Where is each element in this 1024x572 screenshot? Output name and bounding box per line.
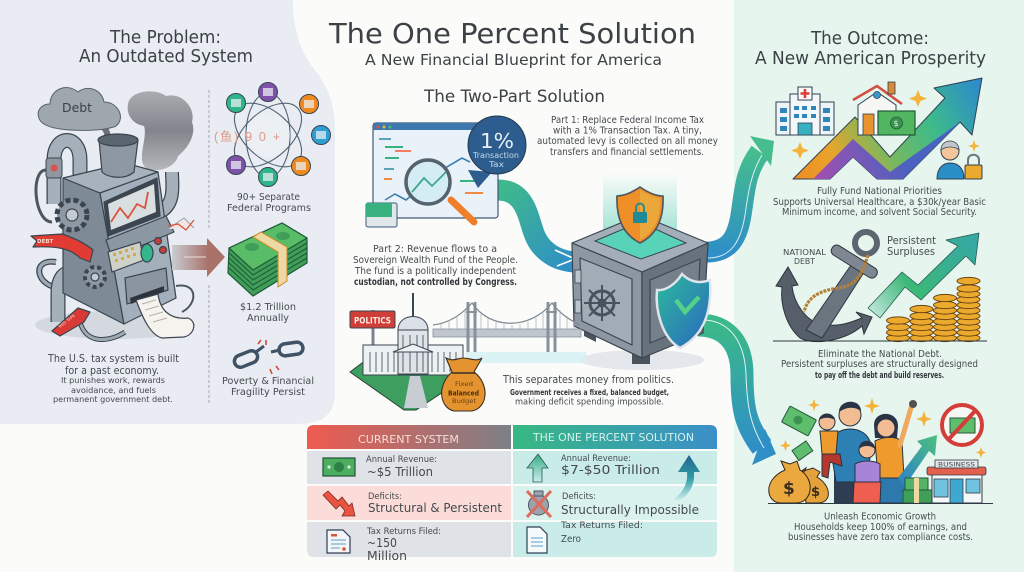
text: part 1: Part 1: Replace Federal Income Tax bbox=[551, 115, 704, 126]
label: national debt: NATIONAL bbox=[783, 248, 827, 257]
arrow: badge to vault bbox=[498, 190, 578, 262]
label: national debt bbox=[783, 248, 827, 266]
icon: sparkles bbox=[791, 90, 980, 159]
icon: house and cash: $ bbox=[894, 119, 899, 128]
icon: broken tax machine bbox=[31, 134, 195, 340]
icon: tax return document bbox=[327, 530, 350, 553]
text: part 2: The fund is a politically independent bbox=[354, 266, 516, 277]
shield with check bbox=[657, 274, 710, 348]
paper receipt bbox=[136, 294, 194, 338]
text: part 2: Sovereign Wealth Fund of the People. bbox=[353, 255, 518, 266]
green base bbox=[350, 360, 462, 410]
icon: surplus arrow bbox=[868, 233, 979, 318]
heading: the problem: An Outdated System bbox=[79, 47, 253, 67]
text: unleash economic growth: Unleash Economic Growth bbox=[824, 512, 936, 522]
politics sign bbox=[372, 310, 374, 348]
icon: capitol with politics sign bbox=[350, 293, 463, 410]
comparison table bbox=[307, 425, 717, 563]
icon: fixed balanced budget bag: Balanced bbox=[448, 388, 479, 398]
icon: blank document bbox=[527, 527, 547, 553]
child bbox=[819, 414, 842, 478]
vault faces bbox=[572, 243, 642, 358]
arrow: lower stream head bbox=[555, 250, 575, 266]
column: current system: Annual Revenue: bbox=[366, 455, 437, 465]
icon: family bbox=[819, 400, 917, 503]
capitol building bbox=[363, 345, 463, 375]
machine body bbox=[63, 178, 124, 324]
text: part 2 bbox=[353, 244, 518, 288]
heading: the problem bbox=[79, 28, 253, 67]
text: 1.2 trillion annually bbox=[240, 302, 296, 324]
heading: two-part solution: The Two-Part Solution bbox=[423, 87, 605, 106]
text: eliminate the national debt bbox=[781, 349, 978, 380]
small broken chart bbox=[168, 218, 194, 229]
icon: no tax sign bbox=[942, 405, 982, 445]
icon: transaction dashboard bbox=[366, 123, 498, 227]
icon: stack of cash bbox=[228, 223, 307, 296]
column: current system: Deficits: bbox=[368, 492, 402, 502]
text: poverty and financial fragility: Fragility Persist bbox=[231, 387, 305, 398]
icon: broken chain bbox=[233, 340, 304, 374]
label: persistent surpluses: Persistent bbox=[887, 235, 936, 247]
column: the one percent solution: Tax Returns Filed: bbox=[560, 521, 643, 531]
panel: the outcome background bbox=[734, 0, 1024, 572]
text: eliminate the national debt: Eliminate the National Debt. bbox=[818, 349, 942, 360]
icon: broken tax machine: RED TAPE bbox=[58, 313, 76, 329]
column: the one percent solution: Zero bbox=[561, 534, 581, 545]
icon: federal programs network bbox=[214, 82, 330, 186]
text: separates money from politics: making deficit spending impossible. bbox=[515, 398, 664, 408]
magnifying glass bbox=[451, 200, 474, 222]
text: eliminate the national debt: Persistent surpluses are structurally designed bbox=[781, 359, 978, 370]
icon: fixed balanced budget bag: Budget bbox=[452, 397, 476, 405]
text: separates money from politics: This separates money from politics. bbox=[502, 374, 674, 386]
text: eliminate the national debt: to pay off the debt and build reserves. bbox=[815, 370, 944, 380]
text: part 1: transfers and financial settlements. bbox=[550, 147, 704, 158]
icon: federal programs network: (鱼) 9 0 + bbox=[214, 130, 280, 144]
shield with lock bbox=[617, 187, 663, 243]
icon: falling red arrow bbox=[323, 491, 355, 516]
icon: fixed balanced budget bag: Fixed bbox=[455, 380, 473, 388]
text: fully fund national priorities: Minimum income, and solvent Social Security. bbox=[782, 207, 977, 218]
arrow: problem to costs bbox=[172, 238, 225, 277]
text: part 2: custodian, not controlled by Congress. bbox=[354, 277, 517, 288]
arrow: stream to outcome 1 bbox=[700, 136, 774, 258]
dashboard card bbox=[366, 203, 397, 227]
icon: business shop: BUSINESS bbox=[938, 462, 975, 468]
text: poverty and financial fragility bbox=[222, 376, 314, 398]
column: current system: Tax Returns Filed: bbox=[366, 527, 441, 537]
column: the one percent solution: Structurally Impossible bbox=[561, 502, 699, 517]
column: current system: ~$5 Trillion bbox=[367, 464, 433, 479]
panel: the problem bbox=[0, 0, 335, 424]
ground line bbox=[773, 340, 987, 342]
heading: the outcome bbox=[755, 29, 986, 69]
heading: the problem: The Problem: bbox=[109, 28, 221, 48]
text: problem description: It punishes work, rewards bbox=[61, 375, 165, 385]
icon: business shop bbox=[927, 460, 986, 503]
heading: the outcome: The Outcome: bbox=[810, 29, 929, 49]
column: current system bbox=[307, 425, 511, 563]
text: 90+ separate federal programs bbox=[227, 192, 311, 214]
arrow: stream to outcome 3 bbox=[698, 320, 776, 465]
vault feet bbox=[584, 324, 596, 342]
father bbox=[830, 402, 871, 503]
divider bbox=[208, 90, 210, 230]
icon: broken tax machine: DEBT bbox=[37, 239, 54, 245]
text: part 1: automated levy is collected on all money bbox=[537, 136, 718, 147]
column: the one percent solution: Deficits: bbox=[562, 492, 596, 502]
icon: bridge bbox=[433, 302, 586, 363]
badge: 1% transaction tax bbox=[468, 116, 526, 188]
text: problem description: permanent government debt. bbox=[53, 394, 173, 404]
title: A New Financial Blueprint for America bbox=[365, 51, 662, 69]
text: separates money from politics: Government receives a fixed, balanced budget, bbox=[510, 387, 669, 397]
text: problem description: for a past economy. bbox=[65, 365, 159, 377]
icon: flying cash bbox=[782, 406, 816, 461]
label: persistent surpluses bbox=[887, 235, 936, 258]
text: problem description: The U.S. tax system is built bbox=[47, 353, 179, 365]
icon: rising blue arrow bbox=[673, 455, 700, 500]
text: 90+ separate federal programs: Federal Programs bbox=[227, 203, 311, 214]
panel: the two-part solution bbox=[350, 87, 776, 465]
text: part 1: with a 1% Transaction Tax. A tiny, bbox=[553, 126, 702, 136]
icon: rainbow growth arrow bbox=[793, 78, 982, 179]
text: 1.2 trillion annually: Annually bbox=[247, 313, 289, 324]
column: the one percent solution bbox=[513, 425, 717, 557]
vault shadow bbox=[580, 350, 704, 370]
badge: 1% transaction tax: Transaction bbox=[472, 151, 519, 160]
girl bbox=[853, 441, 881, 503]
icon: vault with shields bbox=[572, 173, 710, 370]
badge: 1% transaction tax: 1% bbox=[480, 129, 514, 153]
column: current system: Million bbox=[367, 548, 407, 563]
column: the one percent solution: $7-$50 Trillion bbox=[561, 462, 660, 477]
icon: debt cloud: Debt bbox=[62, 100, 92, 115]
machine keypad bbox=[108, 242, 144, 272]
text: problem description: avoidance, and fuels bbox=[71, 385, 156, 395]
panel: the outcome bbox=[755, 29, 993, 543]
text: fully fund national priorities: Supports Universal Healthcare, a $30k/year Basic bbox=[773, 197, 986, 208]
machine shadow bbox=[35, 311, 195, 339]
vault glow bbox=[603, 173, 677, 245]
text: problem description bbox=[47, 353, 179, 404]
text: part 1 bbox=[537, 115, 718, 158]
icon: coin stacks bbox=[886, 277, 980, 342]
label: persistent surpluses: Surpluses bbox=[887, 246, 935, 258]
text: fully fund national priorities bbox=[773, 186, 986, 218]
icon: hospital bbox=[776, 87, 834, 135]
text: part 2: Part 2: Revenue flows to a bbox=[373, 244, 497, 255]
text: unleash economic growth: businesses have zero tax compliance costs. bbox=[788, 532, 973, 543]
title bbox=[328, 17, 696, 69]
vault door bbox=[580, 258, 632, 345]
red debt ribbons bbox=[31, 234, 93, 262]
title: The One Percent Solution bbox=[328, 17, 696, 50]
icon: sparkles bbox=[780, 398, 986, 458]
icon: green up arrow bbox=[527, 454, 548, 482]
text: 90+ separate federal programs: 90+ Separate bbox=[237, 192, 300, 203]
icon: debt cloud bbox=[38, 88, 120, 140]
text: unleash economic growth: Households keep 100% of earnings, and bbox=[794, 522, 967, 533]
column: the one percent solution: THE ONE PERCENT SOLUTION bbox=[532, 431, 694, 444]
column: current system: Structural & Persistent bbox=[368, 500, 502, 515]
heading: the outcome: A New American Prosperity bbox=[755, 49, 986, 69]
machine screen bbox=[104, 178, 160, 236]
column: current system: ~150 bbox=[367, 535, 397, 550]
icon: money bags bbox=[769, 461, 828, 503]
icon: smoke bbox=[128, 91, 193, 170]
icon: money bags: $ bbox=[783, 479, 795, 499]
ground line bbox=[768, 502, 993, 504]
icon: cash pile bbox=[903, 478, 933, 503]
icon: anchor bbox=[776, 232, 879, 342]
machine control shelf bbox=[106, 216, 174, 258]
label: national debt: DEBT bbox=[794, 257, 815, 266]
icon: dollar bill bbox=[323, 458, 355, 476]
icon: capitol with politics sign: POLITICS bbox=[354, 316, 391, 326]
icon: money bags: $ bbox=[811, 485, 820, 500]
left panel background bbox=[0, 0, 335, 424]
text: 1.2 trillion annually: $1.2 Trillion bbox=[240, 302, 296, 313]
icon: senior with lock bbox=[937, 141, 982, 179]
machine slot bbox=[125, 268, 168, 304]
icon: fixed balanced budget bag bbox=[442, 358, 485, 411]
icon: house and cash bbox=[853, 82, 915, 135]
text: unleash economic growth bbox=[788, 512, 973, 543]
column: current system: CURRENT SYSTEM bbox=[358, 433, 459, 446]
machine chimney bbox=[99, 140, 138, 177]
text: poverty and financial fragility: Poverty & Financial bbox=[222, 376, 314, 387]
icon: crossed out deficit bag bbox=[527, 491, 551, 517]
text: fully fund national priorities: Fully Fund National Priorities bbox=[817, 186, 942, 197]
gears bbox=[57, 200, 87, 230]
vault platform bbox=[595, 222, 686, 259]
icon: growth arrow bbox=[898, 435, 937, 486]
text: separates money from politics bbox=[502, 374, 674, 408]
column: the one percent solution: Annual Revenue: bbox=[561, 454, 631, 464]
badge: 1% transaction tax: Tax bbox=[488, 160, 505, 169]
machine pipes bbox=[36, 140, 193, 340]
mother bbox=[874, 400, 917, 503]
